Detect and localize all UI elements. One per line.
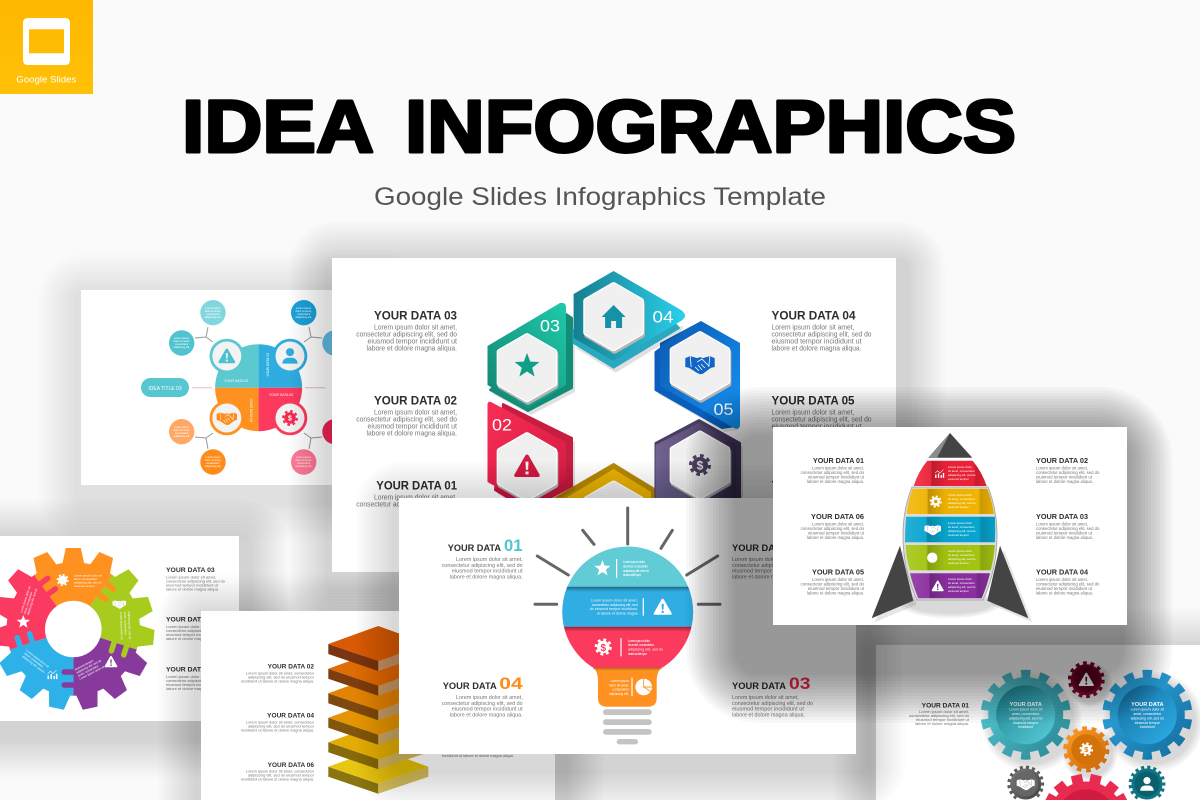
text block: data 01: YOUR DATA 01 (376, 480, 458, 492)
band content: red: sit amet, consectetur (628, 643, 655, 647)
text block: bulb data 04: consectetur adipiscing elit, sed do (442, 701, 523, 707)
band content: red: Lorem ipsum dolor (628, 639, 651, 643)
rocket band: green: eiusmod tempor (948, 561, 969, 565)
small text circles: consectetur (297, 461, 311, 465)
text block: rocket data 02: labore et dolore magna aliqua. (1036, 479, 1093, 484)
text block: rocket data 01: eiusmod tempor incididunt ut (808, 474, 865, 479)
rocket band: purple (910, 573, 990, 598)
text block: rocket data 04: Lorem ipsum dolor sit amet, (1036, 577, 1088, 582)
small text circles: Lorem ipsum (174, 425, 189, 429)
hex 01: yellow (552, 464, 659, 548)
text block: gears data 01: labore et dolore magna aliqua. (915, 721, 969, 726)
text block: rocket data 05 (801, 570, 865, 596)
text block: data 02: eiusmod tempor incididunt ut (368, 422, 457, 431)
icon circle: warning (210, 339, 244, 373)
text block: bulb data 01: labore et dolore magna aliqua. (450, 574, 523, 580)
rocket band: blue: eiusmod tempor (948, 533, 969, 537)
small text circles: Lorem ipsum (174, 336, 189, 340)
text block: gear data 03: consectetur adipiscing elit, sed do (166, 578, 226, 584)
text block: data 05: YOUR DATA 05 (772, 396, 855, 408)
text block: stack data 04: incididunt ut labore et dolore magna aliqua. (241, 728, 314, 732)
text block: stack data 02: adipiscing elit, sed do eiusmod tempor (248, 674, 315, 680)
text block: rocket data 03: Lorem ipsum dolor sit amet, (1036, 522, 1088, 526)
hex 02: red (488, 402, 575, 514)
text block: bulb data 04: eiusmod tempor incididunt ut (452, 707, 523, 713)
bulb neck: orange (593, 667, 662, 707)
gear: blue large (1104, 672, 1200, 772)
text block: rocket data 05: labore et dolore magna aliqua. (807, 590, 864, 596)
hex 02: red: 02 (492, 416, 512, 435)
text block: bulb data 02: consectetur adipiscing elit, sed do (732, 563, 813, 569)
hidden text fragment: incididunt ut labore et dolore magna aliqua. (442, 753, 514, 758)
clover body (215, 344, 302, 431)
gear segment text: Lorem ipsum dolor sit (74, 574, 102, 578)
text block: gear data 01: labore et dolore magna aliqua. (166, 686, 219, 691)
text block: gear data 01: eiusmod tempor incididunt ut (166, 682, 219, 687)
subtitle: Google Slides Infographics Template (374, 183, 826, 211)
band content: teal: Lorem ipsum dolor (623, 560, 646, 564)
rocket wings (872, 546, 1032, 622)
gear segment text: eiusmod tempor (74, 584, 95, 588)
text block: bulb data 03: Lorem ipsum dolor sit amet, (732, 695, 799, 701)
text block: rocket data 06: YOUR DATA 06 (811, 514, 864, 521)
text block: data 02: Lorem ipsum dolor sit amet, (374, 408, 457, 417)
band content: teal: eiusmod tempor (623, 573, 642, 577)
text block: gears data 01: YOUR DATA 01 (922, 703, 969, 710)
panel: light bulb slide (399, 498, 856, 754)
gear segment text: eiusmod tempor (74, 659, 94, 672)
text block: gears data 01 (909, 703, 970, 726)
text block: data 04 (772, 311, 872, 353)
clover body: YOUR DATA 03 (266, 353, 270, 377)
text block: bulb data 04: Lorem ipsum dolor sit amet, (456, 695, 523, 701)
text block: rocket data 06: Lorem ipsum dolor sit amet, (812, 522, 864, 526)
gear segment text: Lorem ipsum dolor sit (79, 665, 105, 681)
text block: gears data 01: eiusmod tempor incididunt ut (916, 717, 970, 722)
text block: rocket data 01 (801, 458, 865, 484)
small text circles: dolor sit amet, (174, 428, 190, 432)
gear segment text: adipiscing elit, sed do (74, 580, 102, 584)
gear segment text: adipiscing elit, sed do (75, 658, 102, 675)
small text circles: consectetur (175, 342, 189, 346)
gear segment text (19, 574, 132, 681)
panel: left slide with clover mind map (81, 290, 381, 485)
text block: gear data 01: consectetur adipiscing elit, sed do (166, 678, 226, 683)
gear: blue large: YOUR DATA (1131, 702, 1164, 708)
text block: stack data 04: adipiscing elit, sed do eiusmod tempor (248, 724, 315, 728)
text block: bulb data 01: 01 (504, 537, 522, 555)
panel: gear slide (0, 536, 239, 721)
segment: orange (7, 548, 140, 695)
text block: bulb data 02: Lorem ipsum dolor sit amet, (732, 557, 799, 563)
panel: hexagon slide (332, 258, 896, 572)
small text circles: adipiscing elit, (205, 315, 221, 319)
text block: gear data 03: eiusmod tempor incididunt ut (166, 582, 219, 588)
text block: data 04: consectetur adipiscing elit, sed do (772, 330, 872, 339)
rocket band: purple: adipiscing elit, sed do (948, 585, 976, 589)
segment: green (0, 541, 171, 713)
small text circles: adipiscing elit, (296, 464, 312, 468)
text block: bulb data 03: YOUR DATA (732, 681, 786, 692)
rocket band: blue: Lorem ipsum dolor (948, 521, 972, 525)
icon: slide frame (23, 18, 70, 65)
text block: stack data 04 (241, 713, 315, 732)
text block: rocket data 06 (801, 514, 865, 540)
gear: blue large: Lorem ipsum dolor sit (1131, 708, 1164, 712)
text block: gear data 02: eiusmod tempor incididunt ut (166, 632, 219, 637)
segment: blue (0, 536, 166, 734)
text block: data 03 (356, 311, 457, 353)
icon circle: handshake (210, 401, 244, 435)
text block: rocket data 05: consectetur adipiscing elit, sed do (801, 582, 865, 587)
bulb neck: orange: adipiscing elit, (609, 692, 629, 696)
small text circles: adipiscing elit, (174, 434, 190, 438)
small text circles: Lorem ipsum (206, 306, 220, 310)
hex 04: cyan: 04 (652, 308, 674, 327)
text block: bulb data 01 (442, 537, 523, 580)
text block: rocket data 02: Lorem ipsum dolor sit amet, (1036, 466, 1088, 470)
band content: teal (594, 559, 649, 578)
hex 03: green (488, 303, 575, 415)
text block: rocket data 03: labore et dolore magna aliqua. (1036, 535, 1093, 540)
band content: teal: sit amet, consectetur (623, 564, 649, 568)
gear segment text: amet, consectetur (23, 651, 44, 668)
text block: data 02: consectetur adipiscing elit, sed do (356, 415, 457, 424)
hex 06: purple (656, 420, 743, 504)
small text circles: dolor sit amet, (296, 458, 312, 462)
gear: dark red small (1068, 663, 1112, 707)
small text circles: dolor sit amet, (174, 339, 190, 343)
small text circles: consectetur (297, 312, 311, 316)
icon circle: dollar gear (273, 401, 307, 435)
bulb rays (535, 508, 720, 604)
small text circles: consectetur (206, 312, 220, 316)
gear: orange (1063, 727, 1117, 781)
icon: house (602, 305, 626, 328)
small text circles (169, 300, 348, 475)
small text circles: adipiscing elit, (296, 315, 312, 319)
text block: rocket data 01: consectetur adipiscing elit, sed do (801, 470, 865, 475)
text block: bulb data 03: consectetur adipiscing elit, sed do (732, 701, 813, 707)
text block: rocket data 01: labore et dolore magna aliqua. (807, 479, 864, 484)
gear segment text: Lorem ipsum dolor sit (119, 612, 124, 640)
band content: red: adipiscing elit, sed do (628, 648, 663, 652)
gear segment text: Lorem ipsum dolor sit (25, 649, 50, 669)
text block: bulb data 03: 03 (789, 675, 810, 693)
gear: gray (1009, 767, 1042, 800)
title: IDEA (182, 85, 374, 168)
rocket band: red (914, 461, 987, 486)
text block: data 05: eiusmod tempor incididunt ut (772, 422, 862, 431)
text block: bulb data 01: consectetur adipiscing elit, sed do (442, 563, 523, 569)
clover body: YOUR DATA 03 (269, 393, 293, 397)
bulb screw base (603, 709, 652, 744)
text block: stack data 04: Lorem ipsum dolor sit amet, consectetur (246, 720, 315, 724)
rocket band: red: adipiscing elit, sed do (948, 473, 976, 477)
rocket band: yellow: Lorem ipsum dolor (948, 493, 972, 497)
text block: rocket data 04: consectetur adipiscing elit, sed do (1036, 582, 1100, 587)
text block: gear data 01 (166, 667, 226, 691)
text block: data 02 (356, 396, 457, 438)
gear: dark teal (1130, 767, 1164, 800)
gear: teal large (982, 672, 1082, 772)
gear segment text: amet, consectetur (74, 577, 97, 581)
text block: data 02: labore et dolore magna aliqua. (366, 429, 457, 438)
text block: data 05: consectetur adipiscing elit, sed do (772, 415, 872, 424)
text block: rocket data 03: YOUR DATA 03 (1036, 514, 1088, 521)
text block: gears data 01: Lorem ipsum dolor sit amet, (919, 709, 969, 714)
gear segment text: adipiscing elit, sed do (21, 654, 46, 674)
icon circle: dollar gear: $ (288, 416, 292, 422)
band content: blue: do eiusmod tempor incididunt, (590, 607, 638, 611)
hex 05: blue (656, 321, 740, 432)
band content: blue: ut labore et dolore magna (597, 612, 638, 616)
text block: data 05: Lorem ipsum dolor sit amet, (772, 408, 854, 417)
text block: rocket data 04: eiusmod tempor incididunt ut (1036, 586, 1093, 591)
puzzle tabs (17, 578, 128, 685)
gear: blue large: eiusmod tempor (1135, 721, 1161, 725)
logo badge: Google Slides (0, 0, 93, 94)
gear segment text: adipiscing elit, sed do (26, 588, 38, 615)
bulb neck: orange: dolor sit amet, (609, 683, 629, 687)
text block: rocket data 03 (1036, 514, 1100, 540)
gear: blue large: amet, consectetur (1133, 712, 1162, 716)
gear: teal large: adipiscing elit, sed do (1009, 716, 1042, 720)
text block: rocket data 01: YOUR DATA 01 (813, 458, 864, 465)
text block: data 01: consectetur adipiscing elit, sed do (356, 500, 457, 509)
rocket band: green: sit amet, consectetur (948, 553, 975, 557)
text block: bulb data 01: YOUR DATA (448, 543, 501, 554)
text block: bulb data 04: 04 (499, 675, 524, 693)
text block: data 03: Lorem ipsum dolor sit amet, (374, 323, 457, 332)
title: INFOGRAPHICS (405, 85, 1016, 168)
text block: bulb data 03: eiusmod tempor incididunt ut (732, 707, 804, 713)
text block: rocket data 02: YOUR DATA 02 (1036, 458, 1088, 465)
small text circles: Lorem ipsum (296, 306, 311, 310)
text block: rocket data 04: labore et dolore magna aliqua. (1036, 590, 1093, 596)
band content: red (596, 638, 663, 656)
rocket body frame (903, 487, 997, 600)
text block: rocket data 06: consectetur adipiscing elit, sed do (801, 526, 865, 531)
connector lines (192, 327, 325, 449)
text block: stack data 02 (241, 664, 315, 684)
text block: data 04: YOUR DATA 04 (772, 311, 856, 323)
gear: teal large: amet, consectetur (1012, 712, 1040, 716)
text block: bulb data 04: labore et dolore magna aliqua. (450, 712, 523, 718)
text block: gears data 01: consectetur adipiscing elit, sed do (909, 713, 969, 718)
text block: stack data 06: adipiscing elit, sed do eiusmod tempor (248, 772, 315, 778)
gear: teal large: eiusmod tempor (1013, 721, 1039, 725)
text block: bulb data 01: Lorem ipsum dolor sit amet, (456, 557, 523, 563)
small text circles: dolor sit amet, (205, 309, 221, 313)
text block: rocket data 01: Lorem ipsum dolor sit amet, (812, 466, 864, 470)
text block: stack data 02: incididunt ut labore et dolore magna aliqua. (241, 678, 314, 684)
hex 06: purple: $ (697, 458, 704, 472)
text block: bulb data 04: YOUR DATA (443, 681, 497, 692)
text block: rocket data 05: Lorem ipsum dolor sit amet, (812, 577, 864, 582)
gear segment text: amet, consectetur (123, 612, 128, 635)
panel: rocket slide (773, 427, 1127, 625)
text block: rocket data 05: eiusmod tempor incididunt ut (808, 586, 865, 591)
band content: red: eiusmod tempor (628, 652, 648, 656)
gear: blue large: incididunt (1140, 725, 1155, 729)
text block: data 01: Lorem ipsum dolor sit amet, (374, 493, 457, 502)
clover body: YOUR DATA 03 (224, 379, 248, 383)
bulb head bands (562, 546, 694, 668)
text block: stack data 06: incididunt ut labore et dolore magna aliqua. (241, 776, 314, 782)
text block: rocket data 06: eiusmod tempor incididunt ut (808, 530, 865, 535)
text block: stack data 06: Lorem ipsum dolor sit amet, consectetur (246, 768, 315, 774)
gear segment text: amet, consectetur (22, 591, 33, 614)
small text circles: Lorem ipsum (296, 455, 311, 459)
plate stack (328, 626, 428, 794)
text block: rocket data 04: YOUR DATA 04 (1036, 570, 1088, 577)
gear: orange: $ (1084, 745, 1089, 754)
text block: data 04: Lorem ipsum dolor sit amet, (772, 323, 854, 332)
text block: stack data 02: YOUR DATA 02 (268, 664, 315, 671)
rocket band: green: adipiscing elit, sed do (948, 557, 976, 561)
segment: red (0, 541, 157, 713)
text block: bulb data 02: eiusmod tempor incididunt ut (732, 569, 803, 575)
band content: teal: adipiscing elit, sed do (623, 569, 649, 573)
text block: bulb data 02: YOUR DATA (732, 543, 786, 554)
text block: gear data 02: Lorem ipsum dolor sit amet, (166, 624, 216, 629)
rocket band: blue (905, 517, 995, 542)
text block: gear data 02: YOUR DATA 02 (166, 617, 215, 624)
text block: rocket data 05: YOUR DATA 05 (812, 570, 864, 577)
gear: teal large: YOUR DATA (1009, 702, 1042, 708)
gear segment text: adipiscing elit, sed do (127, 612, 132, 640)
rocket band: purple: sit amet, consectetur (948, 581, 975, 585)
text block: rocket data 02: consectetur adipiscing elit, sed do (1036, 470, 1100, 475)
text block: data 03: labore et dolore magna aliqua. (366, 344, 457, 353)
logo label: Google Slides (16, 74, 77, 86)
text block: rocket data 03: consectetur adipiscing elit, sed do (1036, 526, 1100, 531)
rocket band: yellow (907, 489, 994, 514)
small text circles: adipiscing elit, (174, 345, 190, 349)
clover body: YOUR DATA 03 (249, 398, 253, 422)
gear icons (17, 575, 126, 679)
gear segment text: Lorem ipsum dolor sit (19, 586, 32, 613)
text block: bulb data 02 (732, 543, 813, 580)
panel: stacked plates slide (201, 611, 555, 800)
rocket band: purple: eiusmod tempor (948, 589, 969, 593)
text block: gear data 03: Lorem ipsum dolor sit amet, (166, 574, 216, 580)
text block: gear data 03 (166, 567, 226, 592)
text block: bulb data 03 (732, 675, 813, 718)
small text circles: adipiscing elit, (205, 464, 221, 468)
rocket band: red: Lorem ipsum dolor (948, 465, 972, 469)
band content: blue: Lorem ipsum dolor sit amet, (591, 598, 638, 602)
rocket band: red: sit amet, consectetur (948, 469, 975, 473)
text block: gear data 03: YOUR DATA 03 (166, 567, 215, 574)
small text circles: Lorem ipsum (206, 455, 220, 459)
gear: teal large: Lorem ipsum dolor sit (1009, 708, 1042, 712)
rocket nose (928, 433, 972, 458)
band content: red: $ (601, 643, 607, 654)
text block: data 05 (772, 396, 872, 431)
panel: lower-right gears slide (876, 645, 1200, 800)
small text circles: dolor sit amet, (296, 309, 312, 313)
rocket band: blue: sit amet, consectetur (948, 525, 975, 529)
bulb neck: orange: consectetur (613, 688, 630, 692)
text block: gear data 02: labore et dolore magna aliqua. (166, 636, 219, 641)
small text circles: consectetur (206, 461, 220, 465)
rocket band: yellow: sit amet, consectetur (948, 497, 975, 501)
pill: idea title: IDEA TITLE 03 (148, 386, 182, 392)
text block: rocket data 04 (1036, 570, 1100, 596)
hex 04: cyan (574, 271, 685, 373)
small text circles: consectetur (175, 431, 189, 435)
text block: stack data 06: YOUR DATA 06 (268, 762, 315, 769)
text block: data 03: eiusmod tempor incididunt ut (368, 337, 457, 346)
gear segment text: amet, consectetur (77, 664, 99, 678)
puzzle gear (0, 536, 175, 734)
text block: rocket data 02: eiusmod tempor incididunt ut (1036, 474, 1093, 479)
text block: rocket data 02 (1036, 458, 1100, 484)
bulb neck: orange: Lorem ipsum (611, 679, 629, 683)
text block: stack data 02: Lorem ipsum dolor sit amet, consectetur (246, 670, 315, 676)
pill: idea title (141, 378, 189, 397)
text block: bulb data 03: labore et dolore magna aliqua. (732, 712, 805, 718)
text block: bulb data 04 (442, 675, 524, 718)
text block: stack data 06 (241, 762, 315, 782)
gear: red large (1044, 774, 1129, 800)
rocket band: green: Lorem ipsum dolor (948, 549, 972, 553)
small text circles: dolor sit amet, (205, 458, 221, 462)
sliver heading: data 06: YOUR DATA 06 (772, 480, 854, 492)
rocket band: blue: adipiscing elit, sed do (948, 529, 976, 533)
text block: bulb data 01: eiusmod tempor incididunt ut (452, 569, 523, 575)
text block: gear data 02 (166, 617, 226, 641)
text block: data 04: eiusmod tempor incididunt ut (772, 337, 862, 346)
band content: blue: consectetur adipiscing elit, sed (592, 603, 638, 607)
text block: gear data 03: labore et dolore magna aliqua. (166, 586, 219, 592)
gear: blue large: adipiscing elit, sed do (1131, 716, 1164, 720)
text block: bulb data 02: labore et dolore magna aliqua. (732, 574, 805, 580)
title (182, 85, 1016, 168)
rocket band: green (906, 545, 995, 570)
text block: gear data 02: consectetur adipiscing elit, sed do (166, 628, 226, 633)
text block: data 01 (356, 480, 458, 509)
text block: gear data 01: YOUR DATA 01 (166, 667, 215, 674)
text block: stack data 04: YOUR DATA 04 (267, 713, 315, 720)
icon circle: person (273, 339, 307, 373)
gear: teal large: incididunt (1018, 725, 1033, 729)
text block: data 03: consectetur adipiscing elit, sed do (356, 330, 457, 339)
hex 05: blue: 05 (714, 400, 734, 419)
hex 03: green: 03 (540, 317, 560, 336)
rocket band: yellow: adipiscing elit, sed do (948, 501, 976, 505)
rocket band: red: eiusmod tempor (948, 477, 969, 481)
text block: data 04: labore et dolore magna aliqua. (772, 344, 862, 353)
band content: blue (590, 598, 672, 616)
rocket band: yellow: eiusmod tempor (948, 505, 969, 509)
segment: purple (0, 536, 175, 734)
text block: rocket data 06: labore et dolore magna aliqua. (807, 535, 864, 540)
text block: data 02: YOUR DATA 02 (374, 396, 457, 408)
text block: data 03: YOUR DATA 03 (374, 311, 457, 323)
text block: gear data 01: Lorem ipsum dolor sit amet, (166, 674, 216, 679)
rocket band: purple: Lorem ipsum dolor (948, 577, 972, 581)
text block: rocket data 03: eiusmod tempor incididunt ut (1036, 530, 1093, 535)
